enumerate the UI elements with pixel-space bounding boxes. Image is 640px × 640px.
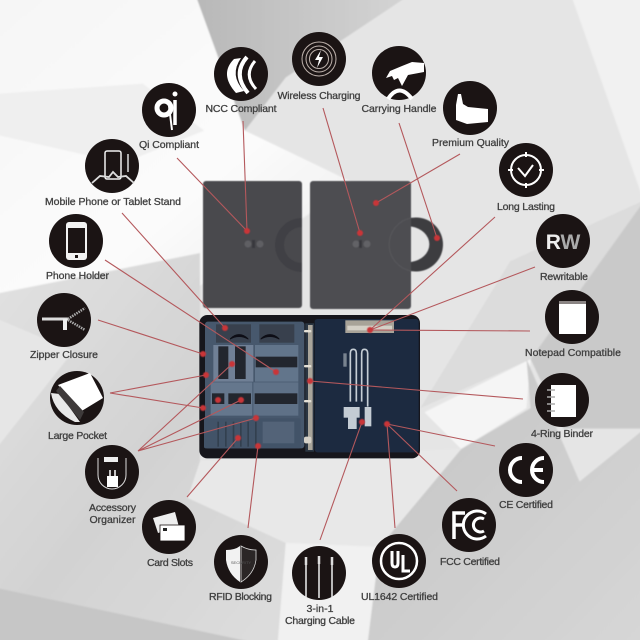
badge: Rewritable: RW [546, 231, 580, 254]
badge: 4-Ring Binder [531, 373, 594, 440]
badge: Large Pocket: Large Pocket [48, 430, 107, 442]
badge: Zipper Closure [30, 293, 98, 361]
badge: Long Lasting: Long Lasting [497, 201, 555, 213]
badge: CE Certified: CE Certified [499, 499, 553, 511]
badge: 4-Ring Binder: 4-Ring Binder [531, 428, 594, 440]
badge: Notepad Compatible [525, 290, 621, 359]
open folder [199, 315, 420, 458]
badge: Large Pocket [48, 371, 107, 442]
red pointer dots [200, 200, 440, 449]
badge: FCC Certified [440, 498, 500, 568]
badge: RFID Blocking: SECURITY [231, 560, 251, 565]
badge: Carrying Handle: Carrying Handle [362, 103, 437, 115]
left organizer panel [204, 322, 304, 448]
badge: CE Certified [499, 443, 553, 511]
badge: Carrying Handle [362, 46, 437, 115]
badge: Notepad Compatible: Notepad Compatible [525, 347, 621, 359]
badge: Qi Compliant [139, 83, 199, 151]
badge: RFID Blocking [209, 535, 272, 603]
badge: NCC Compliant: NCC Compliant [206, 103, 277, 115]
badge: Accessory Organizer: Organizer [90, 514, 136, 526]
badge: Long Lasting [497, 143, 555, 213]
binder rings [304, 323, 314, 452]
badge: Accessory Organizer: Accessory [89, 502, 137, 514]
badge: 3-in-1 Charging Cable: 3-in-1 [306, 603, 334, 615]
badge: Wireless Charging: Wireless Charging [278, 90, 361, 102]
closed folder: handle view [310, 181, 443, 309]
badge: Mobile Phone or Tablet Stand [45, 139, 181, 208]
badge: NCC Compliant [206, 47, 277, 115]
badge: Mobile Phone or Tablet Stand: Mobile Phone or Tablet Stand [45, 196, 181, 208]
leader lines [98, 108, 535, 540]
badge: Premium Quality [432, 81, 510, 149]
badge: Card Slots: Card Slots [147, 557, 193, 569]
badge: Premium Quality: Premium Quality [432, 137, 510, 149]
right notepad panel [315, 319, 419, 452]
badge: FCC Certified: FCC Certified [440, 556, 500, 568]
badge: Zipper Closure: Zipper Closure [30, 349, 98, 361]
badge: UL1642 Certified [361, 534, 438, 603]
badge: Accessory Organizer [85, 445, 139, 526]
badge: UL1642 Certified: UL1642 Certified [361, 591, 438, 603]
badge: 3-in-1 Charging Cable [285, 546, 355, 627]
badge: Rewritable: Rewritable [540, 271, 588, 283]
badge: RFID Blocking: RFID Blocking [209, 591, 272, 603]
badge: Phone Holder [46, 214, 110, 282]
badge: Card Slots [142, 500, 196, 569]
badge: 3-in-1 Charging Cable: Charging Cable [285, 615, 355, 627]
closed folder: front view [203, 181, 302, 308]
badge: Rewritable [536, 214, 590, 283]
badge: Wireless Charging [278, 32, 361, 102]
badge: Phone Holder: Phone Holder [46, 270, 110, 282]
badge: Qi Compliant: Qi Compliant [139, 139, 199, 151]
